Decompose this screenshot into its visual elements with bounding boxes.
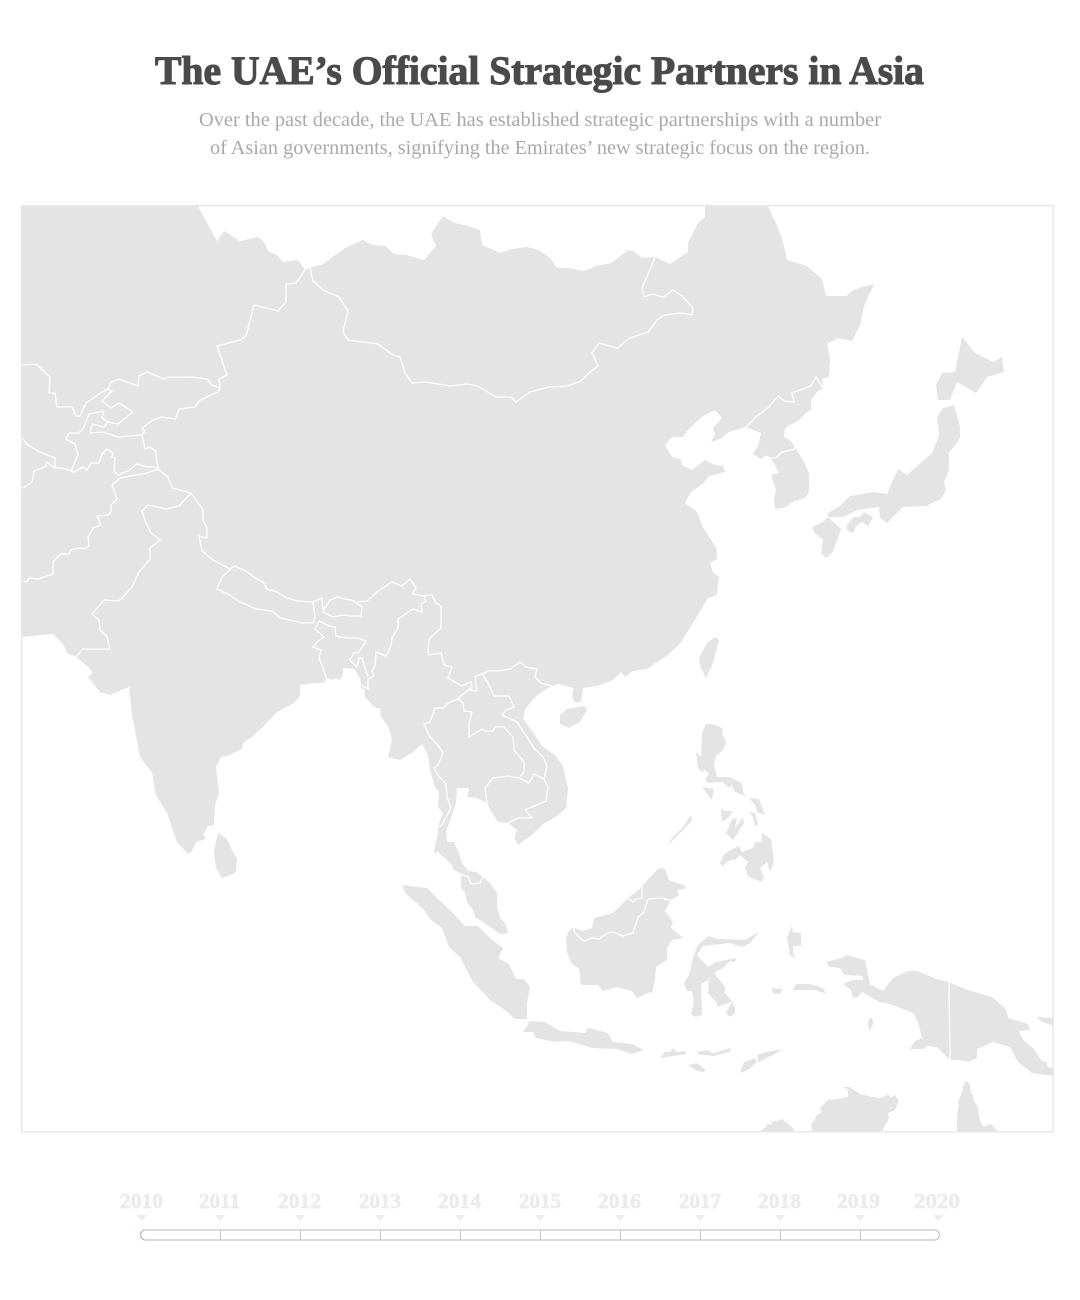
subtitle: Over the past decade, the UAE has established strategic partnerships with a number	[199, 109, 881, 131]
Philippines	[696, 724, 746, 796]
Japan	[936, 337, 1004, 400]
Taiwan	[699, 637, 719, 678]
Sumatra	[402, 885, 530, 1019]
timeline year labels: 2010	[120, 1189, 163, 1213]
Sri Lanka	[214, 833, 237, 878]
subtitle	[199, 109, 881, 159]
timeline year labels: 2011	[199, 1189, 240, 1213]
Australia	[811, 1087, 899, 1132]
timeline	[120, 1189, 960, 1240]
timeline year labels: 2015	[519, 1189, 561, 1213]
map frame	[22, 206, 1053, 1132]
timeline year labels: 2017	[679, 1189, 721, 1213]
timeline year labels: 2016	[598, 1189, 641, 1213]
subtitle: of Asian governments, signifying the Emirates’ new strategic focus on the region.	[210, 137, 870, 159]
timeline markers	[137, 1215, 943, 1221]
map of Asia	[22, 206, 1054, 1132]
timeline year labels: 2014	[438, 1189, 482, 1213]
land masses	[22, 206, 1054, 1132]
timeline year labels: 2013	[359, 1189, 401, 1213]
timeline year labels: 2012	[278, 1189, 321, 1213]
Hainan	[560, 706, 587, 728]
Sulawesi	[684, 932, 759, 1017]
Borneo	[566, 868, 686, 998]
timeline track	[140, 1230, 940, 1240]
New Guinea	[826, 955, 1054, 1076]
timeline year labels: 2019	[837, 1189, 880, 1213]
Lesser Sunda islands	[660, 1048, 686, 1058]
timeline year labels	[120, 1189, 960, 1213]
timeline year labels: 2018	[758, 1189, 801, 1213]
country borders	[22, 257, 950, 1062]
Maluku	[787, 926, 801, 959]
title: The UAE’s Official Strategic Partners in Asia	[155, 48, 924, 93]
timeline year labels: 2020	[914, 1189, 960, 1213]
Java	[523, 1021, 644, 1054]
